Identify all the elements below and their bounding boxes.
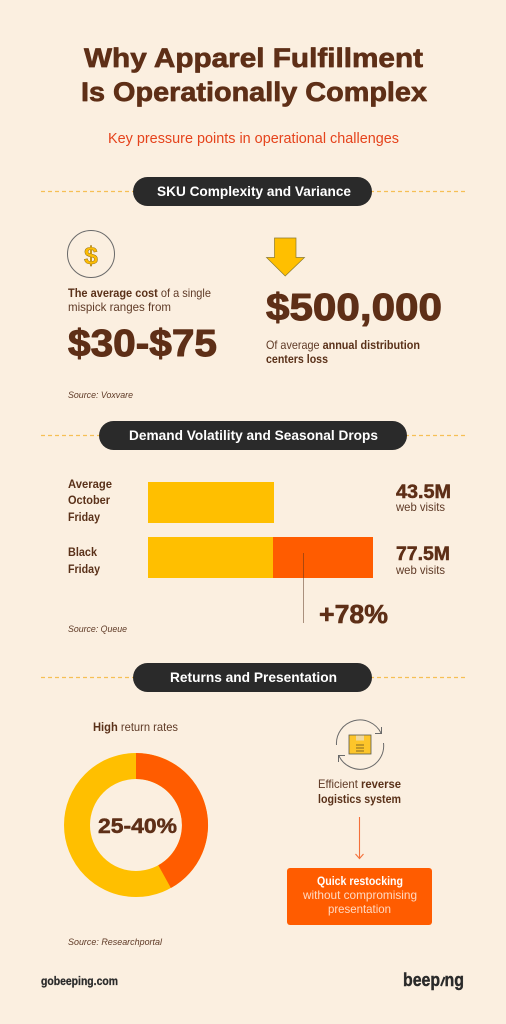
stat: 77.5M: web visits (395, 563, 445, 577)
text: reverse logistics: logistics system (318, 792, 401, 806)
label: Black Friday: Black (68, 545, 97, 559)
heading: demand volatility: Demand Volatility and Seasonal Drops (129, 427, 378, 443)
callout: quick restocking (287, 868, 432, 925)
title (81, 43, 427, 107)
source: Voxvare: Source: Voxvare (68, 390, 133, 401)
source: Researchportal: Source: Researchportal (68, 937, 163, 948)
panel: demand volatility (41, 421, 465, 635)
subtitle: Key pressure points in operational challenges (108, 131, 399, 147)
stat: +78%: +78% (319, 599, 388, 629)
text: annual loss: centers loss (266, 352, 328, 366)
stat: 43.5M: web visits (395, 500, 445, 514)
label: Black Friday: Friday (68, 562, 100, 576)
label: Average October Friday (68, 477, 112, 524)
donut chart (77, 753, 208, 888)
icon: dollar coin (68, 230, 114, 278)
text: average cost: The average cost of a single (68, 286, 211, 300)
stat: 43.5M: 43.5M (396, 482, 451, 503)
text: annual loss (266, 338, 420, 366)
footer: logo: beeping (403, 970, 464, 990)
source: Queue: Source: Queue (68, 624, 127, 635)
footer: website: gobeeping.com (41, 976, 118, 988)
label: high return rates: High return rates (93, 720, 178, 734)
icon: down arrow (266, 238, 304, 276)
label: Average October Friday: October (68, 493, 110, 507)
heading: demand volatility (99, 421, 407, 450)
text: average cost (68, 286, 211, 314)
label: Average October Friday: Average (68, 477, 112, 491)
bar: October (148, 482, 274, 523)
callout: quick restocking: Quick restocking (317, 874, 403, 888)
stat: 43.5M (395, 482, 451, 514)
text: average cost: mispick ranges from (68, 300, 171, 314)
bar: Black Friday (148, 537, 373, 578)
callout line (302, 553, 304, 623)
text: reverse logistics: Efficient reverse (318, 777, 401, 791)
title: Why Apparel Fulfillment (84, 43, 423, 73)
callout: quick restocking: without compromising (302, 888, 417, 902)
stat: $500,000: $500,000 (266, 287, 442, 329)
heading: returns: Returns and Presentation (170, 669, 337, 685)
donut chart: 25-40% (98, 815, 177, 838)
arrow: down to restocking (356, 817, 364, 858)
icon: reverse logistics box (336, 720, 384, 769)
label: Average October Friday: Friday (68, 510, 100, 524)
panel: returns (41, 663, 465, 948)
stat: 77.5M: 77.5M (396, 544, 450, 565)
text: reverse logistics (318, 777, 401, 806)
stat: $30-$75: $30-$75 (68, 323, 217, 365)
text: annual loss: Of average annual distribution (266, 338, 420, 352)
label: Black Friday (68, 545, 100, 576)
stat: 77.5M (395, 544, 450, 577)
heading: SKU complexity (133, 177, 372, 206)
title: Is Operationally Complex (81, 77, 427, 107)
heading: SKU complexity: SKU Complexity and Variance (157, 183, 351, 199)
panel: SKU complexity (41, 177, 465, 401)
icon: dollar coin: $ (84, 242, 98, 270)
heading: returns (133, 663, 372, 692)
callout: quick restocking: presentation (328, 902, 391, 916)
